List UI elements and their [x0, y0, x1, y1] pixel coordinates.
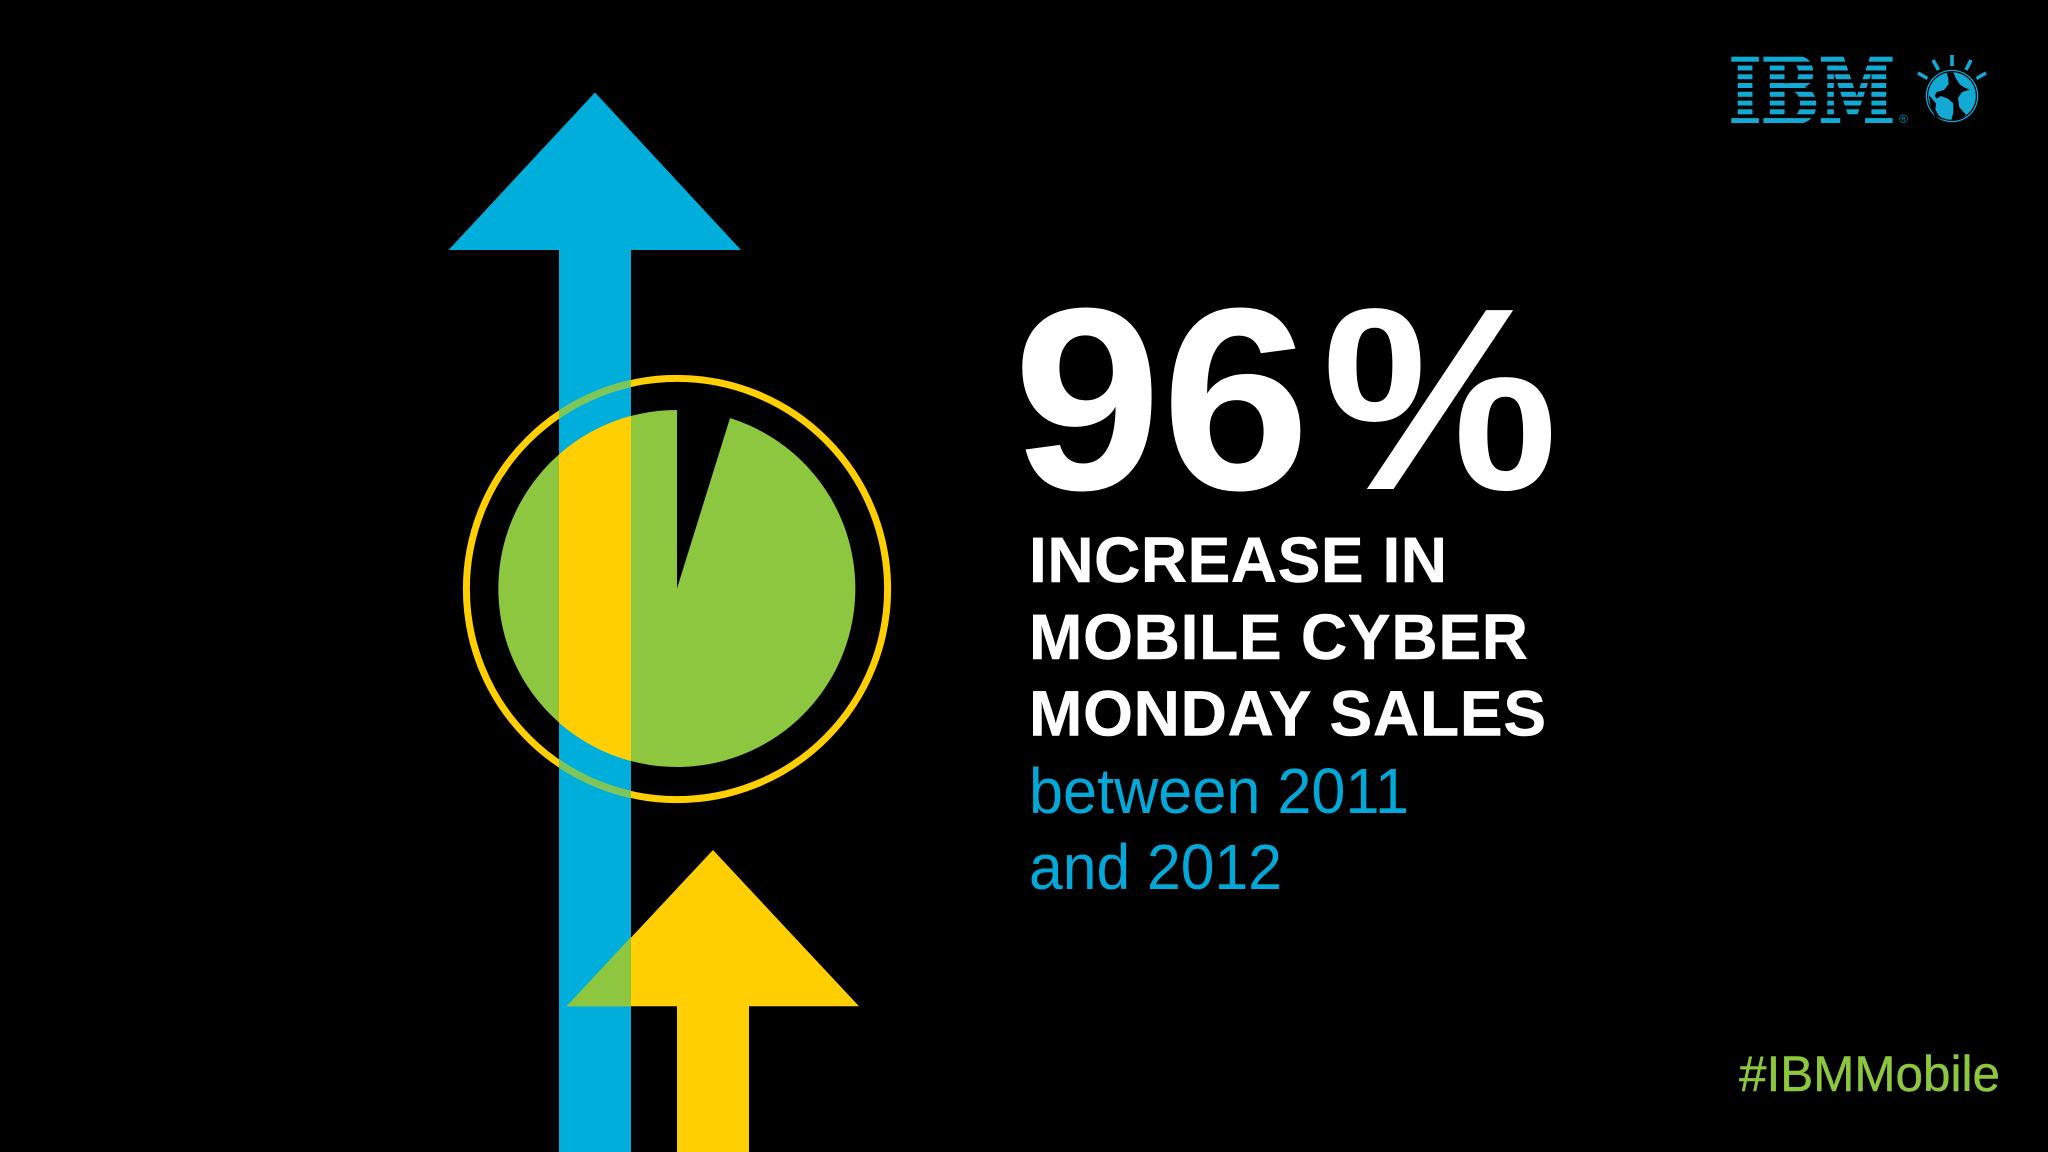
pie overlap with blue arrow — [559, 416, 631, 761]
headline text: MOBILE CYBER — [1029, 601, 1528, 673]
arrow: tall blue — [448, 92, 741, 1152]
date range text: between 2011 — [1029, 755, 1409, 827]
IBM logo — [1725, 39, 1986, 145]
headline number: 96 — [1013, 255, 1310, 545]
date range text — [1029, 755, 1409, 903]
headline text — [1029, 524, 1546, 750]
ring around pie — [466, 378, 888, 800]
hashtag: #IBMMobile — [1739, 1046, 2000, 1102]
registered mark: ® — [1899, 112, 1908, 126]
date range text: and 2012 — [1029, 831, 1282, 903]
pie chart: 96 percent — [498, 410, 855, 767]
headline text: INCREASE IN — [1029, 524, 1447, 596]
headline text: MONDAY SALES — [1029, 678, 1546, 750]
globe — [1926, 70, 1978, 122]
ring overlap with blue arrow — [559, 380, 631, 798]
globe rays — [1918, 55, 1986, 78]
headline number: % — [1322, 255, 1558, 545]
headline number — [1013, 255, 1558, 545]
arrow overlap: green triangle — [567, 937, 631, 1006]
logo wordmark: IBM — [1729, 39, 1895, 145]
arrow: short yellow — [567, 850, 859, 1152]
